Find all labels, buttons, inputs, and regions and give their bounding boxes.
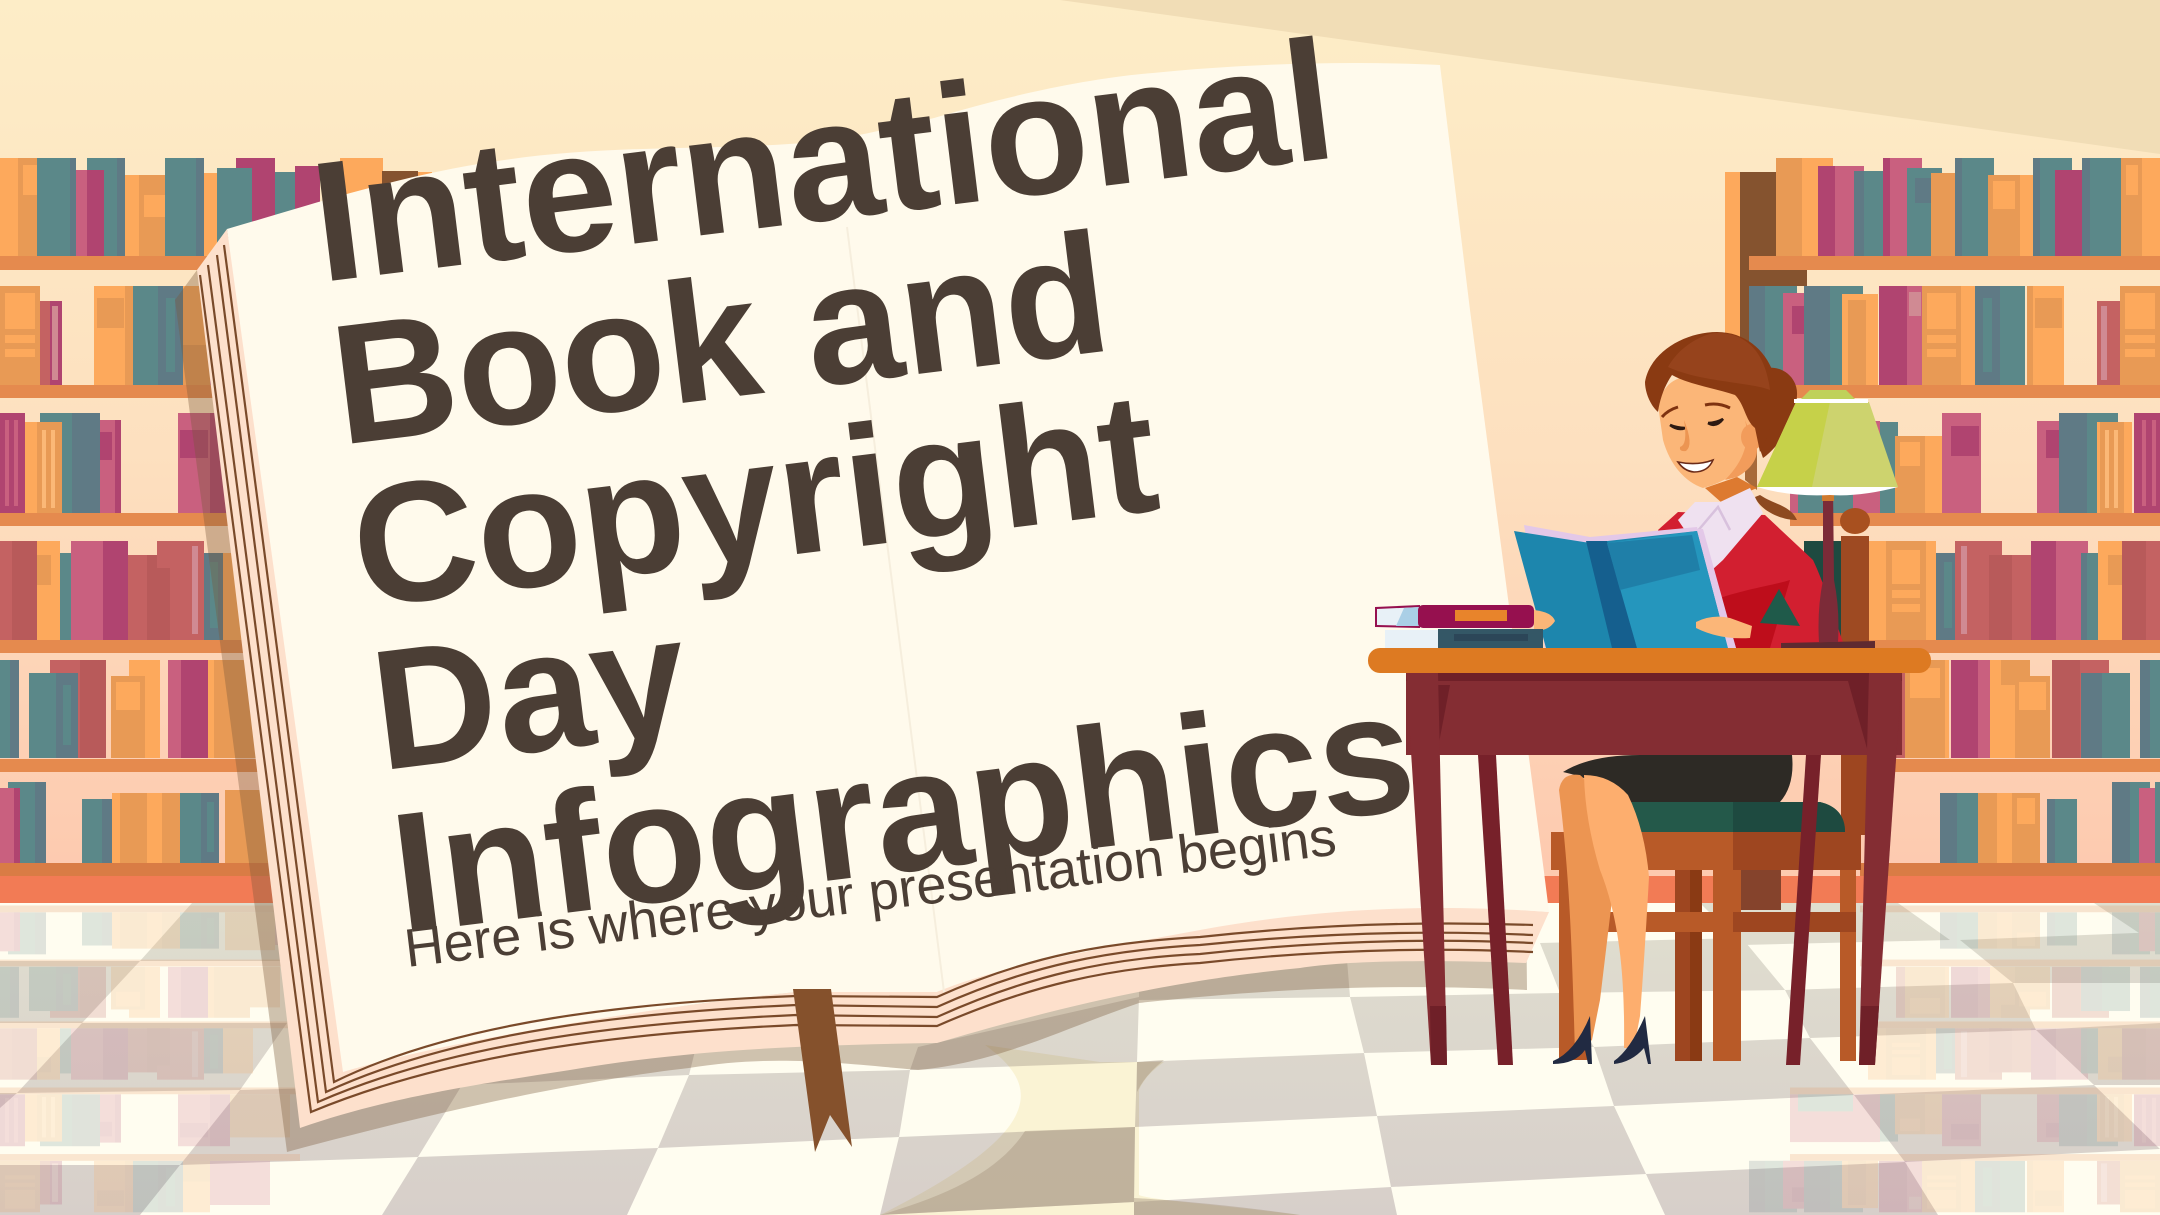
neck xyxy=(1705,477,1757,503)
lamp base xyxy=(1781,641,1875,648)
hand at right of book xyxy=(1696,617,1752,638)
chair xyxy=(1551,508,1870,1061)
title: Copyright xyxy=(342,356,1167,644)
lamp xyxy=(1757,390,1898,648)
open book xyxy=(175,63,1549,1152)
checkered floor xyxy=(0,903,2160,1215)
skirt xyxy=(1563,755,1792,802)
reading book xyxy=(1514,525,1736,648)
lamp shade xyxy=(1798,390,1858,402)
bookshelves with books xyxy=(0,158,2160,903)
bookmark ribbon xyxy=(793,989,852,1152)
floor reflection of the shelves xyxy=(0,905,2160,1212)
sweater xyxy=(1658,512,1845,648)
lamp stem xyxy=(1818,487,1838,642)
title: Day xyxy=(362,579,697,807)
collar xyxy=(1678,488,1763,570)
front leg xyxy=(1584,775,1649,1048)
back leg xyxy=(1559,775,1612,1054)
desk apron xyxy=(1406,673,1902,755)
soft floor shadow xyxy=(880,1045,1300,1215)
ceiling xyxy=(1060,0,2160,154)
title: Infographics xyxy=(382,655,1424,970)
title: International xyxy=(302,4,1344,319)
chair back xyxy=(1804,541,1856,640)
stacked books xyxy=(1375,605,1543,648)
subtitle: Here is where your presentation begins xyxy=(401,807,1339,979)
sweater elbow patch xyxy=(1760,589,1800,626)
page edge lines xyxy=(200,245,1533,1112)
woman reading xyxy=(1553,332,1845,1064)
page edges xyxy=(197,229,1549,1128)
wall background xyxy=(0,0,2160,903)
chair seat cushion xyxy=(1624,802,1845,832)
desk front legs xyxy=(1406,673,1447,1065)
book shadow xyxy=(175,270,1527,1152)
hair bun and ponytail xyxy=(1745,368,1797,520)
desk back legs xyxy=(1478,755,1513,1065)
pages xyxy=(227,63,1549,1072)
spine crease xyxy=(847,227,944,992)
chair seat rail xyxy=(1551,832,1733,870)
desk xyxy=(1368,648,1931,1065)
title: Book and xyxy=(322,197,1119,482)
chair legs xyxy=(1559,860,1587,1060)
desk top xyxy=(1368,648,1931,673)
hand holding book xyxy=(1534,610,1555,630)
head xyxy=(1645,332,1775,488)
high heel shoes xyxy=(1553,1016,1651,1064)
